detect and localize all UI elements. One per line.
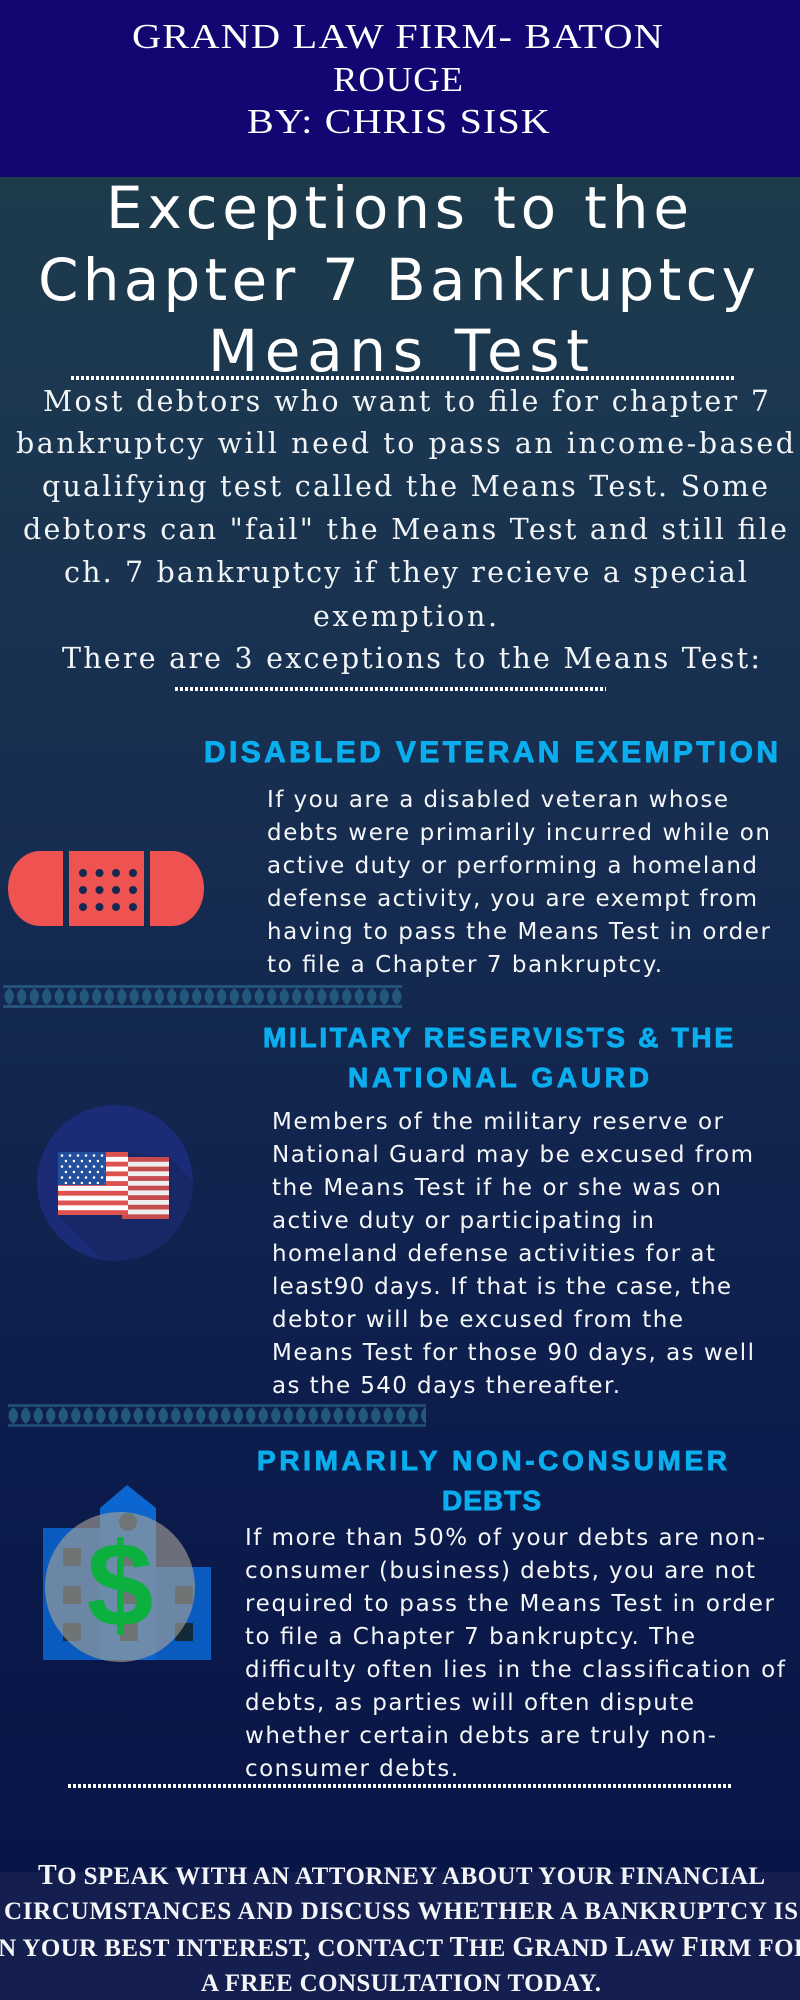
heading: disabled veteran exemption: DISABLED VETERAN EXEMPTION [204,736,778,769]
body: disabled veteran: If you are a disabled veteran whose [267,787,728,813]
body: military reservists: as the 540 days thereafter. [272,1373,620,1399]
body: non-consumer debts: consumer debts. [245,1756,458,1782]
heading: military reservists: MILITARY RESERVISTS & THE [263,1022,733,1053]
intro text: qualifying test called the Means Test. Some [42,470,768,503]
body: non-consumer debts: debts, as parties will often dispute [245,1690,694,1716]
title: Means Test [208,317,589,385]
section: military reservists [37,1022,754,1399]
body: military reservists: the Means Test if he or she was on [272,1175,721,1201]
header banner [0,0,800,177]
body: non-consumer debts: to file a Chapter 7 bankruptcy. The [245,1624,695,1650]
divider band 1 [3,985,402,1008]
body: disabled veteran: having to pass the Means Test in order [267,919,771,945]
body: military reservists: least90 days. If that is the case, the [272,1274,731,1300]
intro text: Most debtors who want to file for chapter 7 [43,385,769,418]
body: non-consumer debts: required to pass the Means Test in order [245,1591,775,1617]
footer call to action: TO SPEAK WITH AN ATTORNEY ABOUT YOUR FINANCIAL [38,1860,765,1891]
body: non-consumer debts: If more than 50% of your debts are non- [245,1525,765,1551]
body: military reservists: National Guard may be excused from [272,1142,753,1168]
intro text: bankruptcy will need to pass an income-based [16,427,794,460]
footer call to action: CIRCUMSTANCES AND DISCUSS WHETHER A BANKRUPTCY IS [4,1898,798,1925]
body: disabled veteran [267,787,771,978]
icon: bandage [8,851,204,926]
body: military reservists [272,1109,754,1399]
footer call to action: IN YOUR BEST INTEREST, CONTACT THE GRAND LAW FIRM FOR [0,1932,800,1963]
footer call to action: A FREE CONSULTATION TODAY. [201,1970,601,1997]
title [38,174,756,385]
intro text: ch. 7 bankruptcy if they recieve a special [64,556,747,589]
heading: primarily non-consumer debts [257,1445,727,1516]
body: disabled veteran: active duty or performing a homeland [267,853,757,879]
heading: primarily non-consumer debts: PRIMARILY NON-CONSUMER [257,1445,727,1476]
body: military reservists: active duty or participating in [272,1208,654,1234]
body: military reservists: debtor will be excused from the [272,1307,683,1333]
body: non-consumer debts: whether certain debts are truly non- [245,1723,716,1749]
body: military reservists: Members of the military reserve or [272,1109,724,1135]
divider band 2 [8,1404,426,1427]
heading: primarily non-consumer debts: DEBTS [442,1485,541,1516]
body: non-consumer debts: difficulty often lies in the classification of [245,1657,786,1683]
body: military reservists: Means Test for those 90 days, as well [272,1340,754,1366]
body: disabled veteran: defense activity, you are exempt from [267,886,757,912]
icon: american flag [37,1105,193,1261]
title: Chapter 7 Bankruptcy [38,246,756,314]
header banner: ROUGE [333,60,464,99]
intro text: debtors can "fail" the Means Test and still file [23,513,787,546]
header banner: GRAND LAW FIRM- BATON [132,17,664,56]
section: non-consumer debts [43,1445,786,1782]
body: non-consumer debts: consumer (business) debts, you are not [245,1558,755,1584]
icon: building with dollar coin: $ [87,1518,153,1652]
body: disabled veteran: debts were primarily incurred while on [267,820,770,846]
intro text [16,385,794,675]
intro text: exemption. [313,600,497,633]
heading: military reservists: NATIONAL GAURD [348,1062,649,1093]
header banner: BY: CHRIS SISK [247,102,551,141]
title: Exceptions to the [106,174,689,242]
body: military reservists: homeland defense activities for at [272,1241,715,1267]
footer call to action [0,1860,800,2000]
body: non-consumer debts [245,1525,786,1782]
icon: building with dollar coin [43,1485,211,1662]
body: disabled veteran: to file a Chapter 7 bankruptcy. [267,952,662,978]
section: disabled veteran [8,736,778,978]
intro text: There are 3 exceptions to the Means Test: [62,642,760,675]
heading: military reservists [263,1022,733,1093]
